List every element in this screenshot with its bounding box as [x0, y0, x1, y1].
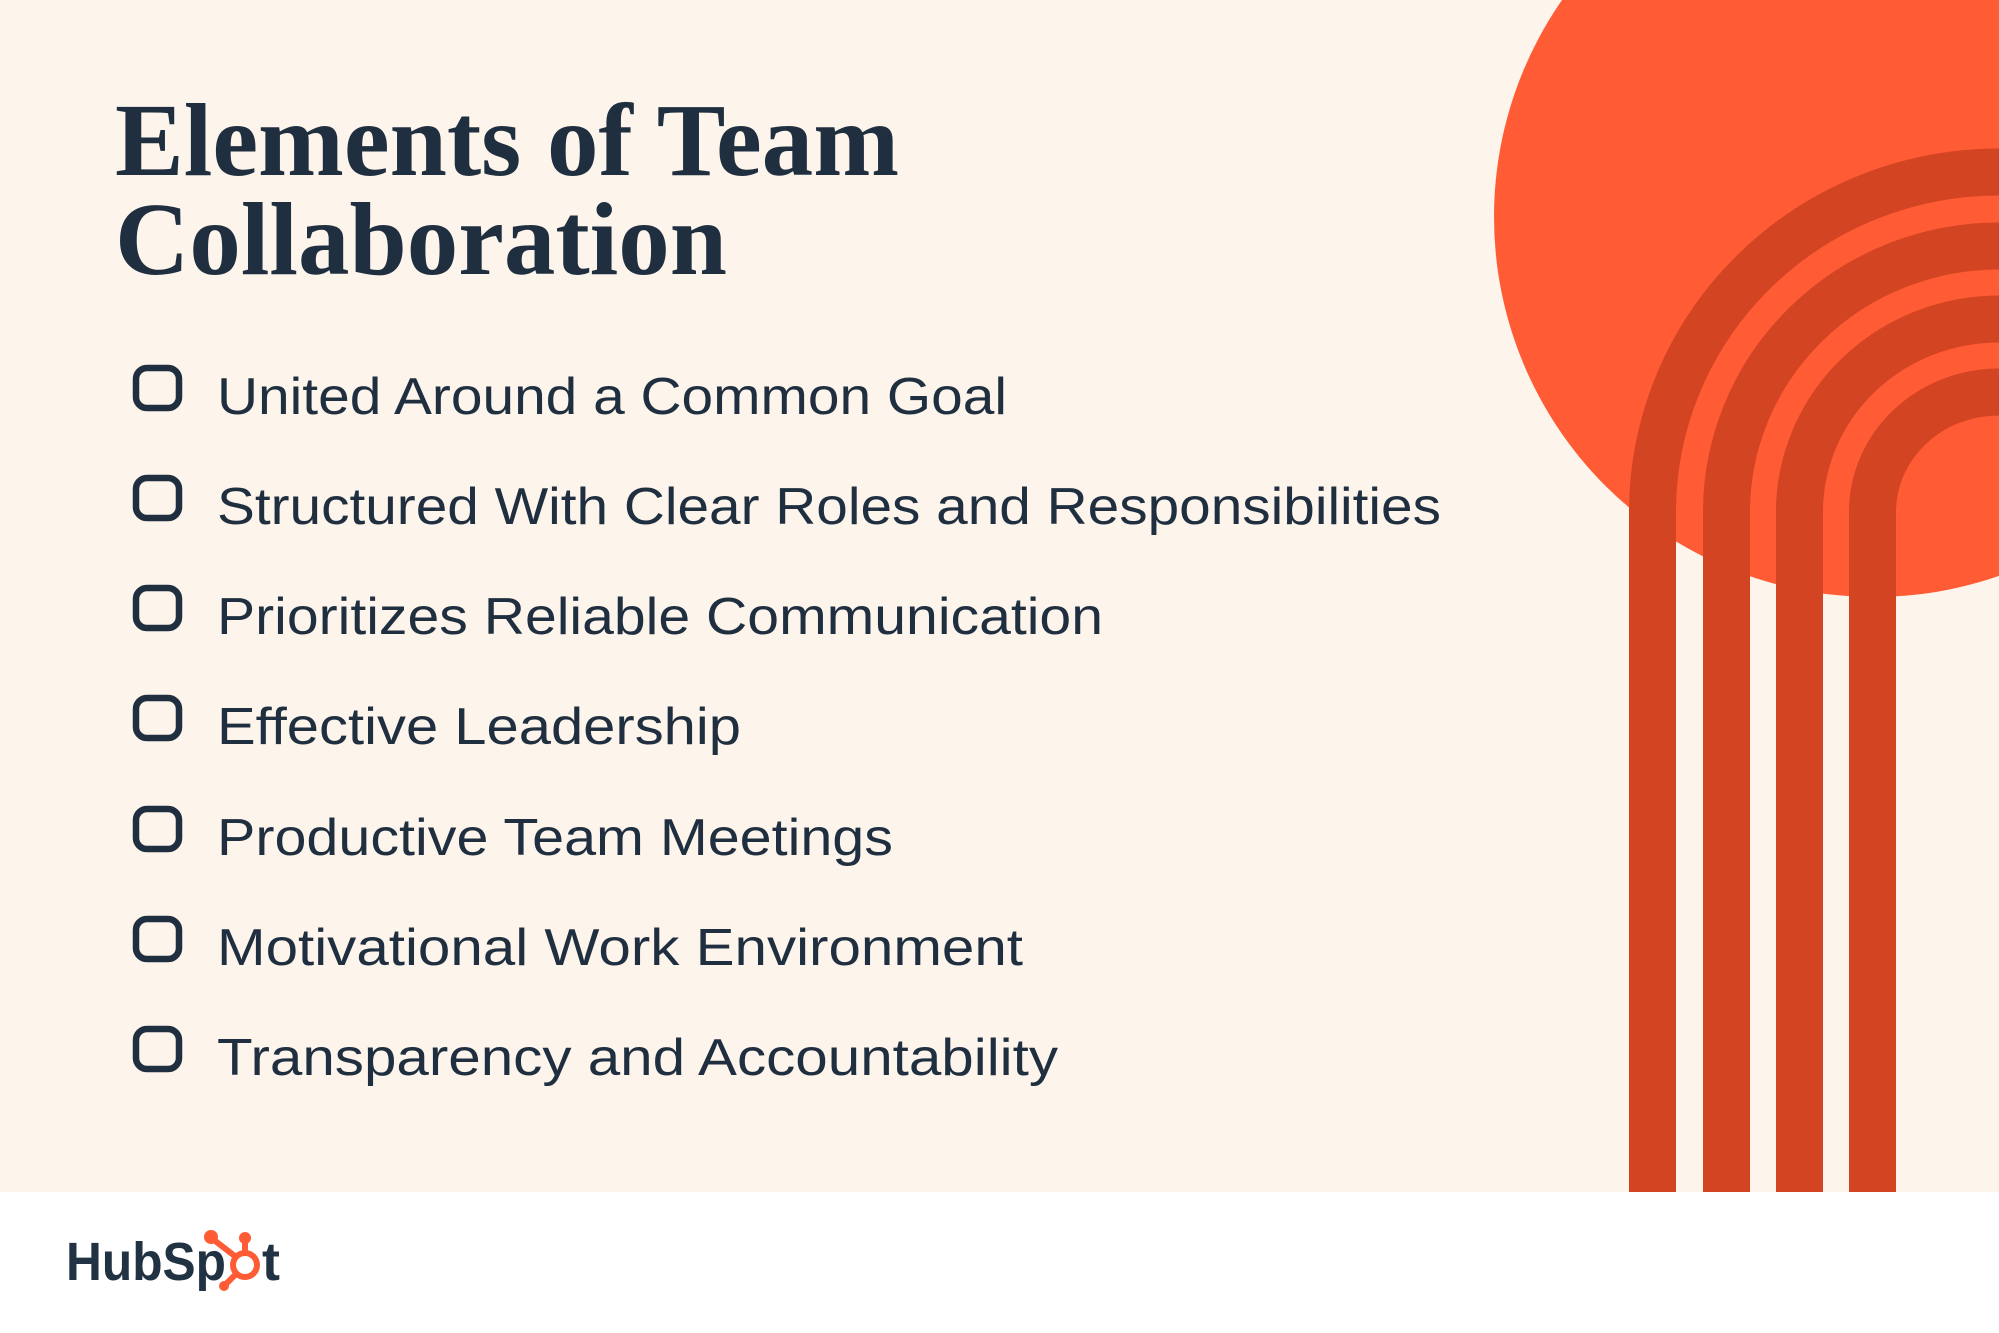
- title: Collaboration: [115, 182, 727, 297]
- title: Elements of Team: [115, 83, 899, 198]
- logo: HubSpot: HubSp: [66, 1232, 226, 1292]
- decoration: orange circle and arches: [1494, 0, 1999, 1200]
- item 4: Effective Leadership: [217, 698, 741, 756]
- item 1: United Around a Common Goal: [217, 368, 1007, 426]
- title: [115, 83, 899, 297]
- logo: HubSpot: t: [262, 1232, 280, 1292]
- item 5: Productive Team Meetings: [217, 809, 893, 867]
- item 6: Motivational Work Environment: [217, 919, 1024, 977]
- checklist: [136, 368, 1441, 1087]
- item 2: Structured With Clear Roles and Responsibilities: [217, 478, 1441, 536]
- item 3: Prioritizes Reliable Communication: [217, 588, 1103, 646]
- item 7: Transparency and Accountability: [217, 1029, 1058, 1087]
